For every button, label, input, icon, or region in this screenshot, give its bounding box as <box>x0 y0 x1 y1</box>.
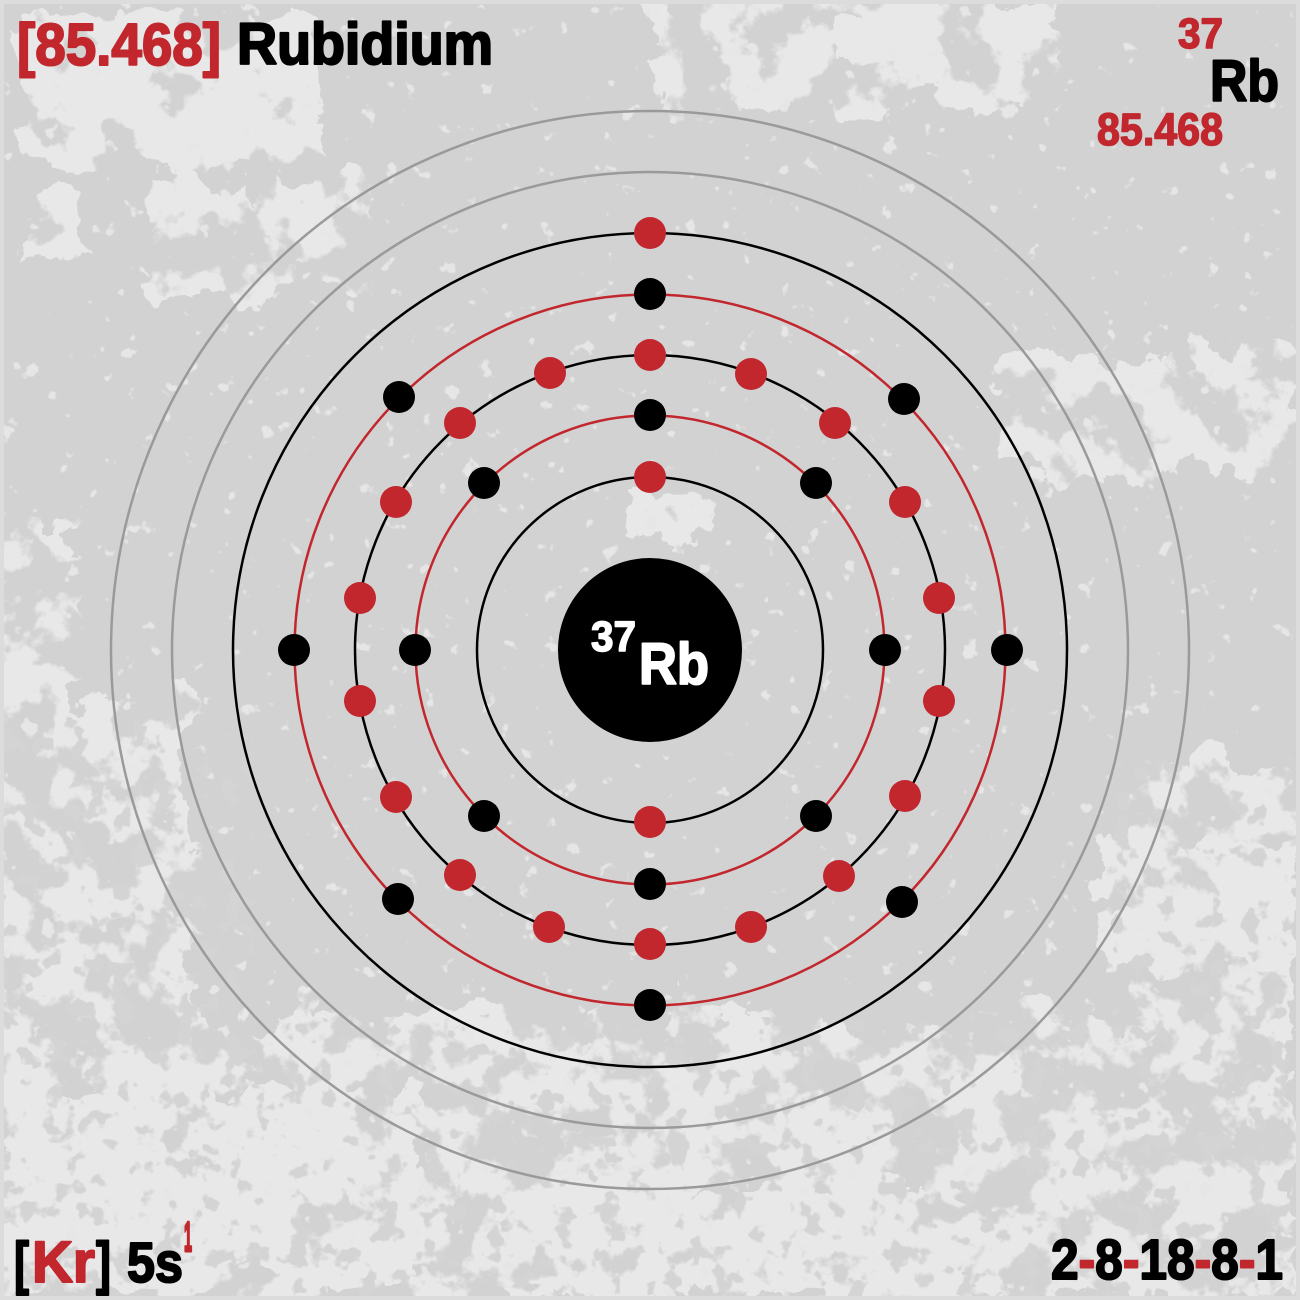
electron configuration <box>14 1213 192 1296</box>
infographic: rubidium atom: 1 <box>184 1213 192 1260</box>
element card: top right: 37 <box>1178 10 1223 58</box>
nucleus: Rb <box>639 632 709 697</box>
electrons: shell 4 (8) <box>278 278 1023 1021</box>
shell distribution: 2-8-18-8-1 <box>1051 1228 1283 1292</box>
electrons: shell 3 (18) <box>344 339 955 960</box>
electron: shell 5 (1) <box>634 217 666 249</box>
empty outer shells <box>111 111 1189 1189</box>
nucleus <box>558 558 742 742</box>
title: Rubidium <box>237 12 493 77</box>
shell 2 orbit <box>416 416 884 884</box>
electron configuration: Kr <box>32 1230 95 1295</box>
background: dark specks over the lower area <box>0 720 1300 1300</box>
title <box>17 12 493 78</box>
shell 4 orbit <box>294 294 1006 1006</box>
title: [85.468] <box>17 12 221 78</box>
atom diagram <box>111 111 1189 1189</box>
electron configuration: ] <box>96 1231 111 1296</box>
element card: top right: Rb <box>1210 49 1279 114</box>
electron configuration: [ <box>14 1231 29 1296</box>
shell 3 orbit <box>355 355 945 945</box>
electron configuration: 5s <box>127 1231 183 1295</box>
shell 1 orbit <box>477 477 823 823</box>
element card: top right <box>1097 10 1279 155</box>
nucleus: 37 <box>591 613 636 661</box>
electrons: shell 2 (8) <box>399 399 901 900</box>
electrons: shell 1 (2) <box>634 461 666 838</box>
shell 5 orbit <box>233 233 1067 1067</box>
element card: top right: 85.468 <box>1097 104 1223 155</box>
